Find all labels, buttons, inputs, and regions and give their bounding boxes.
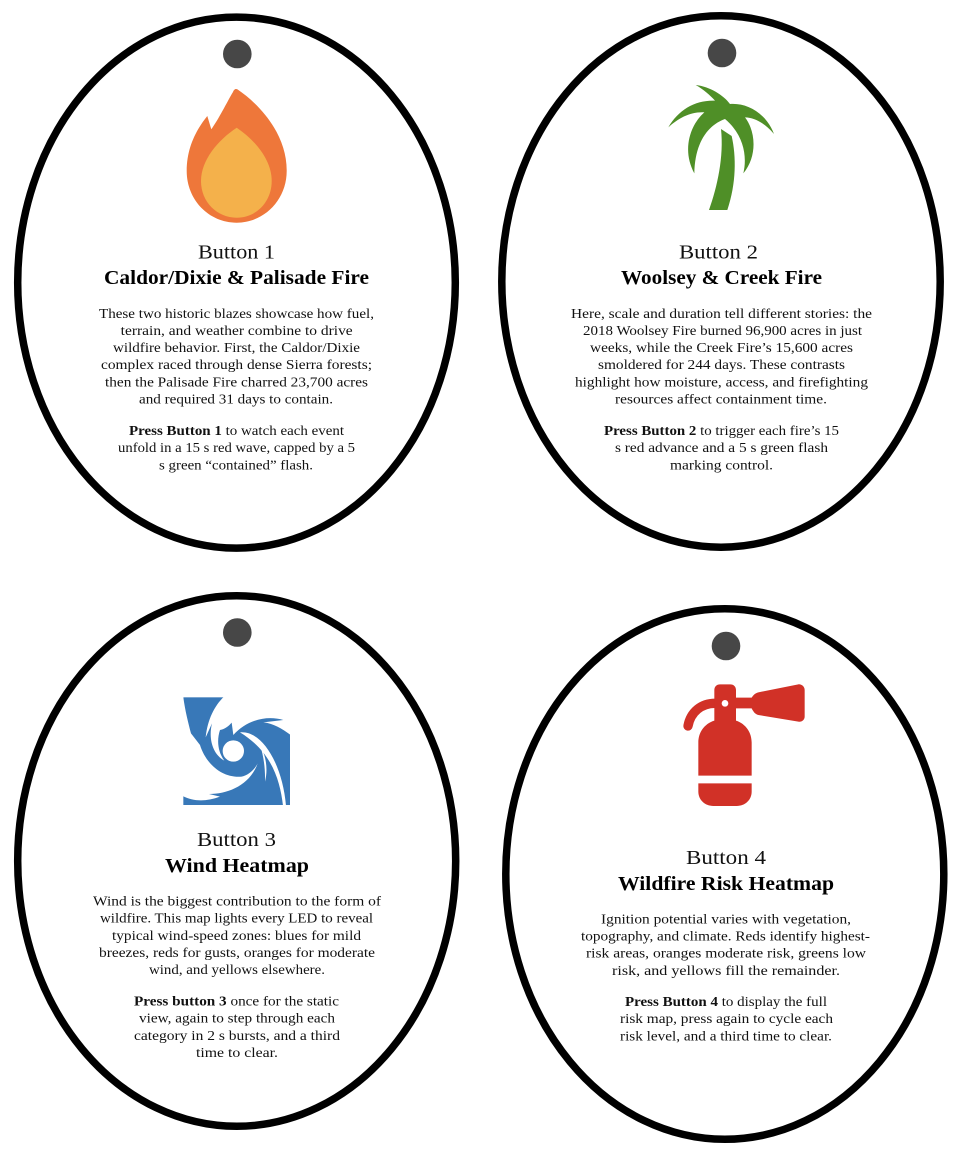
hole: button 1 tag (223, 40, 252, 68)
heading: button 3: Button 3 (197, 829, 276, 851)
heading: button 1: Button 1 (198, 241, 275, 263)
heading: button 4: Button 4 (686, 847, 766, 869)
hole: button 2 tag (708, 39, 736, 67)
text block: description: risk, and yellows fill the remainder. (612, 964, 840, 979)
text block: instructions: risk level, and a third time to clear. (620, 1029, 832, 1044)
text block: description: wind, and yellows elsewhere. (149, 963, 325, 978)
text block: instructions (134, 994, 340, 1061)
text block: instructions (620, 995, 833, 1044)
title: Wind Heatmap: Wind Heatmap (165, 855, 309, 877)
icon: palm tree (668, 85, 774, 210)
text block: instructions: time to clear. (196, 1046, 278, 1061)
text block: instructions: s red advance and a 5 s green flash (615, 441, 828, 456)
text block: description: typical wind-speed zones: blues for mild (112, 929, 361, 944)
text block: description: breezes, reds for gusts, oranges for moderate (99, 946, 375, 961)
text block: description: highlight how moisture, access, and firefighting (575, 375, 868, 390)
text block: instructions: unfold in a 15 s red wave, capped by a 5 (118, 441, 355, 456)
panel: button 2 (502, 16, 940, 547)
text block: description (571, 307, 872, 408)
text block: description: topography, and climate. Reds identify highest- (581, 930, 870, 944)
text block: description: complex raced through dense Sierra forests; (101, 358, 372, 373)
text block: description: smoldered for 244 days. These contrasts (598, 358, 845, 373)
title: Wildfire Risk Heatmap: Wildfire Risk Heatmap (618, 873, 834, 895)
text block: instructions: category in 2 s bursts, and a third (134, 1029, 340, 1044)
hole: button 3 tag (223, 618, 252, 647)
text block: description: weeks, while the Creek Fire’s 15,600 acres (590, 341, 853, 356)
text block: description: terrain, and weather combine to drive (121, 324, 353, 339)
text block: description: 2018 Woolsey Fire burned 96,900 acres in just (583, 324, 862, 339)
panel: button 4 (506, 609, 944, 1139)
title: Woolsey & Creek Fire: Woolsey & Creek Fire (621, 267, 822, 289)
text block: instructions (604, 424, 839, 473)
icon: fire extinguisher (688, 684, 805, 806)
heading: button 2: Button 2 (679, 241, 758, 263)
text block: instructions: Press Button 4 to display the full (625, 995, 827, 1010)
text block: description: resources affect containment time. (615, 392, 827, 408)
icon: wind swirl (183, 697, 291, 806)
text block: description (99, 307, 374, 408)
text block: instructions: s green “contained” flash. (159, 458, 313, 473)
text block: description: Ignition potential varies with vegetation, (601, 912, 851, 927)
panel: button 3 (18, 596, 456, 1126)
text block: description: Here, scale and duration tell different stories: the (571, 307, 872, 322)
text block: instructions: view, again to step through each (139, 1012, 335, 1027)
text block: description: Wind is the biggest contribution to the form of (93, 894, 381, 910)
text block: instructions: Press button 3 once for the static (134, 994, 339, 1010)
text block: instructions: Press Button 2 to trigger each fire’s 15 (604, 424, 839, 439)
text block: description (93, 894, 381, 978)
text block: instructions: risk map, press again to cycle each (620, 1012, 833, 1027)
hole: button 4 tag (712, 632, 740, 660)
text block: description: These two historic blazes showcase how fuel, (99, 307, 374, 322)
icon: flame (187, 89, 287, 223)
text block: description: and required 31 days to contain. (139, 392, 333, 408)
text block: description: then the Palisade Fire charred 23,700 acres (105, 375, 368, 390)
text block: instructions: Press Button 1 to watch each event (129, 424, 344, 439)
text block: instructions (118, 424, 355, 473)
text block: description: wildfire behavior. First, the Caldor/Dixie (113, 341, 360, 356)
text block: description (581, 912, 870, 979)
panel: button 1 (18, 17, 455, 548)
text block: instructions: marking control. (670, 458, 773, 473)
text block: description: risk areas, oranges moderate risk, greens low (586, 947, 867, 962)
text block: description: wildfire. This map lights every LED to reveal (100, 912, 373, 927)
title: Caldor/Dixie & Palisade Fire: Caldor/Dixie & Palisade Fire (104, 267, 369, 289)
